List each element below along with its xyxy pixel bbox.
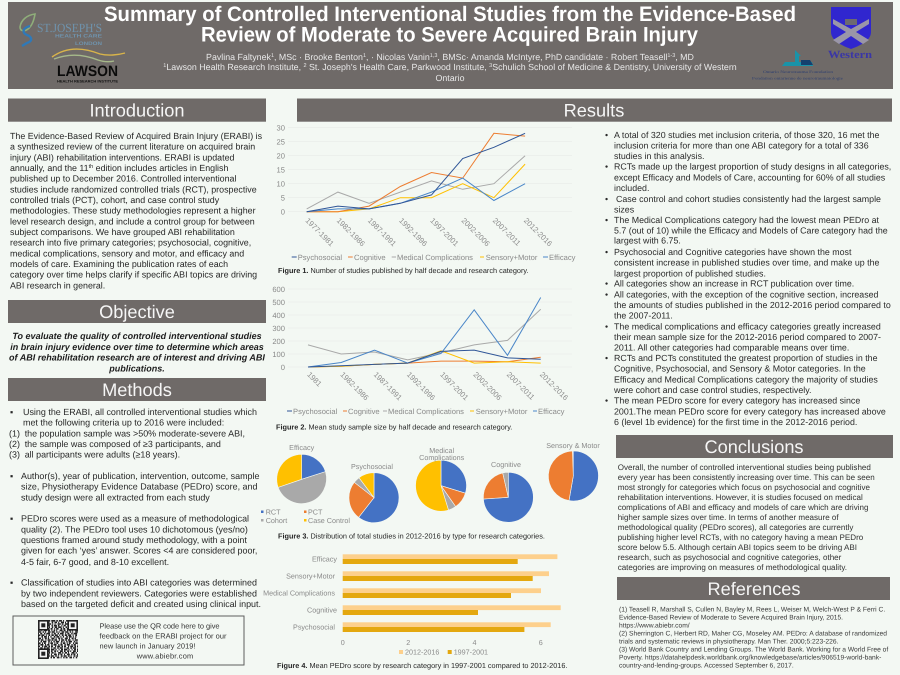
authors and affiliations: , MSc · Brooke Benton [274, 52, 363, 62]
reference list: country-and-lending-groups. Accessed September 6, 2017. [619, 662, 794, 670]
methods criteria list: questions framed around study methodology, with a point [21, 535, 247, 545]
caption: figure 3: Figure 3. Distribution of total studies in 2012-2016 by type for research categories. [278, 532, 545, 540]
methods criteria list: 4-5 fair, 6-7 good, and 8-10 excellent. [21, 557, 169, 567]
logo: Western University crest [828, 7, 872, 61]
results findings list: Cognitive, Psychosocial, and Sensory & Motor categories. In the [614, 364, 866, 374]
caption: figure 1: Figure 1. Number of studies published by half decade and research category. [278, 266, 529, 275]
results findings list: 2001.The mean PEDro score for every category has increased above [614, 406, 886, 416]
heading: Results [297, 98, 892, 122]
reference list: Poverty. https://datahelpdesk.worldbank.org/knowledgebase/articles/906519-world-bank- [619, 654, 881, 662]
y axis labels: 10 [277, 180, 285, 188]
results findings list: included. [614, 183, 649, 193]
results findings list: • [605, 289, 608, 299]
x axis labels: 2012-2016 [522, 216, 554, 248]
y axis labels: 0 [281, 363, 285, 372]
conclusions text: categories are improving on measures of methodological quality. [618, 563, 847, 572]
conclusions text: higher sample sizes over time. In terms of another measure of [618, 513, 839, 522]
results findings list: • [605, 247, 608, 257]
panel: objective [8, 300, 266, 374]
logo: St. Joseph's Health Care London: LONDON [75, 41, 102, 47]
methods criteria list: ▪ [10, 514, 13, 524]
x axis labels [341, 638, 543, 647]
pie legend [261, 508, 350, 525]
logo: Ontario Neurotrauma Foundation [752, 50, 843, 80]
pie legend: Cohort [266, 516, 287, 525]
conclusions text: every year has been consistently increasing over time. This can be seen [618, 473, 875, 482]
QR callout text [100, 621, 227, 660]
methods criteria list: based on the targeted deficit and created using clinical input. [21, 599, 261, 609]
x axis labels: 1992-1996 [405, 370, 437, 402]
reference list: (2) Sherrington C, Herbert RD, Maher CG, Moseley AM. PEDro: A database of randomized [619, 630, 887, 638]
introduction text: subject comparisons. We have grouped ABI rehabilitation [10, 227, 235, 237]
authors and affiliations: 2 [304, 63, 307, 69]
category labels: Medical Complications [263, 588, 335, 598]
y axis labels: 15 [277, 166, 285, 174]
reference list: trials and systematic reviews in physiotherapy. Man Ther. 2000;5:223-226. [619, 638, 839, 646]
methods criteria list: the sample was composed of ≥3 participants, and [25, 439, 221, 449]
results findings list: • [605, 162, 608, 172]
pie: sensory and motor: Sensory & Motor [546, 441, 600, 450]
results findings list: their mean sample size for the 2012-2016 period compared to 2007- [614, 332, 881, 342]
panel: methods [8, 378, 266, 609]
results findings list: All categories show an increase in RCT publication over time. [614, 279, 854, 289]
introduction text: medical complications, sensory and motor, and efficacy and [10, 248, 244, 258]
results findings list: RCTs made up the largest proportion of study designs in all categories, [614, 162, 891, 172]
chart: figure 2 line chart [272, 285, 572, 432]
caption: figure 4: Figure 4. Mean PEDro score by research category in 1997-2001 compared to 2012-2016. [277, 661, 567, 670]
heading: Methods: Methods [102, 380, 172, 400]
authors and affiliations [163, 52, 737, 83]
introduction text: th [89, 164, 93, 170]
pie: cognitive [483, 460, 533, 522]
authors and affiliations: Pavlina Faltynek [206, 52, 271, 62]
x axis labels: 0 [341, 638, 345, 647]
introduction text: category over time helps clarify if specific ABI topics are driving [10, 270, 257, 280]
legend: Psychosocial [298, 253, 342, 262]
conclusions text: publishing higher level RCTs, with no category having a mean PEDro [618, 533, 864, 542]
results findings list: RCTs and PCTs constituted the greatest proportion of studies in the [614, 353, 878, 363]
title: Summary of Controlled Interventional Studies from the Evidence-Based [104, 3, 796, 26]
heading: Objective [8, 300, 266, 323]
x axis labels: 1992-1996 [397, 216, 429, 248]
introduction text: level research design, and include a control group for between [10, 216, 255, 226]
authors and affiliations: 3 [489, 63, 492, 69]
legend: Medical Complications [388, 407, 464, 416]
legend: Cognitive [354, 253, 386, 262]
reference list [619, 606, 888, 670]
authors and affiliations: , MD [675, 52, 694, 62]
title [104, 3, 796, 47]
data lines [307, 133, 525, 212]
x axis labels: 2007-2011 [505, 370, 536, 402]
x axis labels: 2002-2006 [471, 370, 504, 402]
reference list: (3) World Bank Country and Lending Groups. The World Bank. Working for a World Free of [619, 646, 888, 654]
legend: 2012-2016 [405, 648, 439, 656]
category labels: Efficacy [312, 554, 337, 564]
logo: Lawson Health Research Institute: HEALTH RESEARCH INSTITUTE [57, 80, 119, 84]
results findings list: The Medical Complications category had the lowest mean PEDro at [614, 215, 879, 225]
logo: Ontario Neurotrauma Foundation: Ontario Neurotrauma Foundation [763, 70, 833, 74]
heading: Conclusions [616, 435, 893, 458]
y axis labels [272, 285, 285, 372]
results findings list: 2011. All other categories had comparable means over time. [614, 343, 849, 353]
methods criteria list: met the following criteria up to 2016 were included: [23, 418, 224, 428]
x axis labels: 1987-1991 [372, 370, 404, 402]
objective statement: of ABI rehabilitation research are of interest and driving ABI [9, 353, 265, 363]
methods criteria list: (1) [9, 428, 20, 438]
banner [8, 2, 893, 89]
authors and affiliations: , BMSc· Amanda McIntyre, PhD candidate · Robert Teasell [437, 52, 667, 62]
category labels: Psychosocial [293, 622, 335, 632]
results findings list: • [605, 353, 608, 363]
x axis labels: 2002-2006 [460, 216, 492, 248]
introduction text: models of care. Examining the publication rates of each [10, 259, 228, 269]
x axis labels: 1987-1991 [366, 216, 398, 248]
QR callout text: www.abiebr.com [136, 651, 193, 660]
x axis labels: 1977-1981 [304, 216, 336, 248]
objective statement: publications. [108, 364, 165, 374]
conclusions text: rehabilitation interventions. However, it is studies focused on medical [618, 493, 863, 502]
introduction text: edition includes articles in English [93, 163, 228, 173]
methods criteria list: (2) [9, 439, 20, 449]
introduction text: methodologies. These study methodologies represent a higher [10, 206, 256, 216]
y axis labels: 0 [281, 208, 285, 216]
results findings list: • [605, 130, 608, 140]
heading: Objective: Objective [99, 302, 175, 322]
introduction text: a synthesized review of the current literature on acquired brain [10, 142, 255, 152]
methods criteria list: the population sample was >50% moderate-severe ABI, [25, 428, 245, 438]
introduction text: The Evidence-Based Review of Acquired Brain Injury (ERABI) is [10, 131, 263, 141]
x axis labels: 2012-2016 [538, 370, 570, 402]
y axis labels: 300 [272, 324, 285, 333]
results findings list: Efficacy and Medical Complications category the majority of studies [614, 374, 878, 384]
y axis labels: 25 [277, 138, 285, 146]
pie legend: RCT [266, 508, 281, 516]
x axis labels: 2 [406, 638, 410, 647]
y axis labels: 600 [272, 285, 285, 294]
pie: psychosocial: Psychosocial [351, 462, 393, 471]
category labels [263, 554, 337, 632]
heading: Introduction: Introduction [89, 100, 185, 120]
introduction text: published up to December 2016. Controlled interventional [10, 174, 236, 184]
chart: figure 1 line chart [277, 124, 576, 275]
methods criteria list: Author(s), year of publication, intervention, outcome, sample [21, 471, 259, 481]
methods criteria list: size, Physiotherapy Evidence Database (PEDro) score, and [21, 482, 257, 492]
chart: figure 4 bar chart [263, 554, 567, 670]
conclusions text: methodological quality (PEDro scores), all categories are currently [618, 523, 853, 532]
objective statement [9, 331, 265, 374]
results findings list: largest proportion of published studies. [614, 268, 766, 278]
pie: sensory and motor [546, 441, 600, 501]
introduction text: research into five primary categories; psychosocial, cognitive, [10, 238, 251, 248]
y axis labels: 5 [281, 194, 285, 202]
panel: results [261, 98, 892, 670]
introduction text: controlled trials (PCT), cohort, and case control study [10, 195, 220, 205]
caption: figure 2: Figure 2. Mean study sample size by half decade and research category. [276, 422, 512, 432]
legend: 1997-2001 [454, 648, 488, 656]
x axis labels: 6 [539, 638, 543, 647]
conclusions text: most strongly for categories which focus on psychosocial and cognitive [618, 483, 870, 492]
results findings list: the 2007-2011. [614, 311, 673, 321]
reference list: (1) Teasell R, Marshall S, Cullen N, Bayley M, Rees L, Weiser M, Welch-West P & Ferri C. [619, 606, 885, 613]
logo: Lawson Health Research Institute [52, 49, 125, 84]
objective statement: To evaluate the quality of controlled interventional studies [12, 331, 262, 341]
QR callout text: new launch in January 2019! [100, 641, 196, 650]
methods criteria list: ▪ [10, 407, 13, 417]
authors and affiliations: 1 [363, 53, 366, 59]
logo: Western University crest: Western [828, 49, 872, 61]
results findings list: consistent increase in published studies over time, and make up the [614, 258, 880, 268]
results findings list: A total of 320 studies met inclusion criteria, of those 320, 16 met the [614, 130, 880, 140]
legend [399, 648, 488, 656]
results findings list: The mean PEDro score for every category has increased since [614, 396, 860, 406]
x axis labels: 4 [472, 638, 476, 647]
x axis labels [305, 370, 570, 402]
heading: Conclusions: Conclusions [704, 437, 804, 457]
x axis labels [304, 216, 554, 248]
pie: psychosocial [349, 462, 399, 523]
legend: Cognitive [348, 407, 380, 416]
results findings list: The medical complications and efficacy categories greatly increased [614, 321, 881, 331]
panel: references [617, 577, 890, 670]
results findings list: studies in this analysis. [614, 151, 704, 161]
legend: Psychosocial [293, 407, 338, 416]
results findings list: were cohort and case control studies, respectively. [613, 385, 811, 395]
heading: Introduction [8, 98, 266, 122]
panel: conclusions [616, 435, 893, 572]
x axis labels: 1981 [305, 370, 324, 388]
pie: efficacy: Efficacy [289, 443, 315, 452]
conclusions text: score below 5.5. Although certain ABI topics seem to be driving ABI [618, 543, 857, 552]
y axis labels: 400 [272, 311, 285, 320]
results findings list: • [605, 279, 608, 289]
callout: QR code feedback [13, 616, 244, 665]
heading: Methods [8, 378, 266, 401]
pie: medical complications [416, 446, 467, 511]
results findings list: inclusion criteria for more than one ABI category for a total of 336 [614, 141, 869, 151]
legend: Sensory+Motor [486, 253, 538, 262]
y axis labels: 20 [277, 152, 285, 160]
y axis labels: 500 [272, 298, 285, 307]
y axis labels: 100 [272, 350, 285, 359]
authors and affiliations: 1 [163, 63, 166, 69]
legend: Medical Complications [397, 253, 473, 262]
authors and affiliations: Schulich School of Medicine & Dentistry, University of Western [492, 62, 737, 72]
methods criteria list: (3) [9, 450, 20, 460]
results findings list: Psychosocial and Cognitive categories have shown the most [614, 247, 852, 257]
methods criteria list: PEDro scores were used as a measure of methodological [21, 514, 249, 524]
results findings list: 6 (level 1b evidence) for the first time in the 2012-2016 period. [614, 417, 857, 427]
results findings list: • [605, 194, 608, 204]
results findings list: the amounts of studies published in the 2012-2016 period compared to [614, 300, 891, 310]
results findings list: • [605, 215, 608, 225]
chart: figure 3 pie charts [261, 441, 600, 540]
logo: St. Joseph's Health Care London: ST.JOSEPH'S [37, 21, 102, 35]
authors and affiliations: , · Nicolas Vanin [366, 52, 430, 62]
methods criteria list: study design were all extracted from each study [21, 492, 210, 502]
logo: Lawson Health Research Institute: LAWSON [57, 63, 118, 80]
icon: QR code [38, 620, 78, 659]
logo: St. Joseph's Health Care London: HEALTH CARE [55, 34, 103, 40]
introduction text: studies include randomized controlled trials (RCT), prospective [10, 184, 257, 194]
category labels: Cognitive [307, 606, 337, 614]
bars [343, 554, 561, 632]
authors and affiliations: 1-3 [667, 53, 675, 59]
title: Review of Moderate to Severe Acquired Brain Injury [201, 24, 698, 47]
pie legend: PCT [308, 508, 323, 516]
results findings list: 5.7 (out of 10) while the Efficacy and Models of Care category had the [614, 225, 888, 235]
results findings list [605, 130, 891, 427]
legend [292, 253, 576, 262]
data lines [308, 298, 541, 367]
authors and affiliations: 1 [271, 53, 274, 59]
category labels: Sensory+Motor [286, 572, 336, 580]
legend [287, 407, 565, 416]
QR callout text: feedback on the ERABI project for our [100, 631, 227, 640]
results findings list: sizes [614, 204, 635, 214]
authors and affiliations: Ontario [435, 73, 465, 83]
methods criteria list: given for each ‘yes’ answer. Scores <4 are considered poor, [21, 546, 257, 556]
x axis labels: 1982-1986 [338, 370, 371, 402]
methods criteria list: quality (2). The PEDro tool uses 10 dichotomous (yes/no) [21, 524, 248, 534]
objective statement: in brain injury evidence over time to determine which areas [10, 342, 264, 352]
introduction text [10, 131, 263, 290]
y axis labels: 30 [277, 124, 285, 132]
y axis labels [277, 124, 285, 216]
legend: Efficacy [538, 407, 565, 416]
x axis labels: 2007-2011 [491, 216, 522, 248]
x axis labels: 1982-1986 [335, 216, 367, 248]
y axis labels: 200 [272, 337, 285, 346]
methods criteria list: Using the ERABI, all controlled interventional studies which [23, 407, 257, 417]
results findings list: except Efficacy and Models of Care, accounting for 60% of all studies [614, 172, 886, 182]
pie: medical complications: Complications [419, 453, 465, 462]
heading: References [617, 577, 890, 600]
reference list: https://www.abiebr.com/ [619, 622, 690, 630]
logo: Ontario Neurotrauma Foundation: Fondation ontarienne de neurotraumatologie [752, 76, 843, 80]
results findings list: largest with 6.75. [614, 236, 681, 246]
introduction text: ABI research in general. [10, 280, 105, 290]
methods criteria list: all participants were adults (≥18 years). [25, 450, 180, 460]
authors and affiliations: 1,3 [430, 53, 437, 59]
conclusions text [618, 463, 875, 572]
introduction text: annually, and the 11 [10, 163, 89, 173]
methods criteria list: by two independent reviewers. Categories were established [21, 588, 257, 598]
heading: Results: Results [564, 100, 624, 120]
introduction text: injury (ABI) rehabilitation interventions. ERABI is updated [10, 152, 235, 162]
heading: References: References [707, 579, 801, 599]
pie legend: Case Control [308, 516, 350, 525]
results findings list: • [605, 396, 608, 406]
pie: cognitive: Cognitive [491, 460, 521, 469]
legend: Efficacy [549, 253, 576, 262]
x axis labels: 1997-2001 [438, 370, 470, 402]
authors and affiliations: Lawson Health Research Institute, [166, 62, 304, 72]
conclusions text: Overall, the number of controlled interventional studies being published [618, 463, 871, 472]
results findings list: • [605, 321, 608, 331]
methods criteria list: ▪ [10, 471, 13, 481]
panel: introduction [8, 98, 266, 290]
QR callout text: Please use the QR code here to give [100, 621, 220, 630]
results findings list: All categories, with the exception of the cognitive section, increased [614, 289, 879, 299]
conclusions text: research, such as psychosocial and cognitive categories, other [618, 553, 842, 562]
methods criteria list [9, 407, 261, 609]
reference list: Evidence-Based Review of Moderate to Severe Acquired Brain Injury, 2015. [619, 614, 843, 622]
pie: medical complications: Medical [429, 446, 454, 455]
results findings list: Case control and cohort studies consistently had the largest sample [616, 194, 881, 204]
methods criteria list: ▪ [10, 578, 13, 588]
conclusions text: complications of ABI and efficacy and models of care which are driving [618, 503, 868, 512]
methods criteria list: Classification of studies into ABI categories was determined [21, 578, 257, 588]
logo: St. Joseph's Health Care London [20, 14, 103, 47]
pie: efficacy [277, 443, 326, 504]
x axis labels: 1997-2001 [428, 216, 460, 248]
authors and affiliations: St. Joseph's Health Care, Parkwood Institute, [307, 62, 489, 72]
legend: Sensory+Motor [476, 407, 528, 416]
